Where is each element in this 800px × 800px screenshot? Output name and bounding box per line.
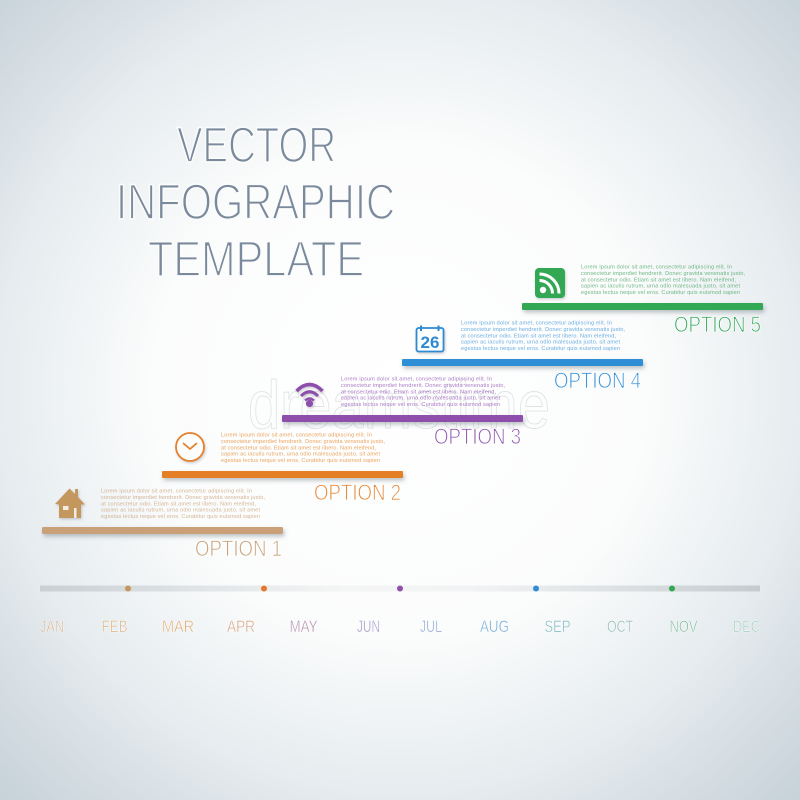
title [116, 117, 395, 287]
text block: option 4: Lorem ipsum dolor sit amet, consectetur adipiscing elit. In [461, 321, 612, 327]
watermark: dreamstime [248, 367, 550, 443]
month labels: OCT [607, 618, 633, 636]
timeline track [40, 586, 760, 592]
month labels: JUN [357, 618, 380, 636]
month labels: JUL [420, 618, 442, 636]
text block: option 5: Lorem ipsum dolor sit amet, consectetur adipiscing elit. In [581, 265, 732, 271]
text block: option 5 [581, 265, 745, 296]
icon: calendar [416, 326, 444, 352]
timeline [40, 586, 760, 636]
text block: option 1: at consectetur odio. Etiam sit amet est libero. Nam eleifend, [101, 501, 256, 507]
month labels: SEP [544, 618, 570, 636]
title: VECTOR [177, 117, 336, 173]
text block: option 4: at consectetur odio. Etiam sit amet est libero. Nam eleifend, [461, 333, 616, 339]
bar: option 3 [282, 415, 523, 422]
month labels: JAN [40, 618, 64, 636]
panel: option 1 [42, 488, 283, 561]
panel: option 5 [522, 265, 763, 337]
text block: option 2: consectetur imperdiet hendrerit. Donec gravida venenatis justo, [221, 439, 385, 445]
text block: option 2 [221, 433, 385, 464]
text block: option 5: egestas lectus neque vel eros. Curabitur quis euismod sapien [581, 290, 740, 296]
timeline markers [125, 586, 675, 592]
panel: option 4 [402, 321, 643, 393]
month labels: APR [227, 618, 255, 636]
text block: option 1 [101, 489, 265, 520]
label: option 4: OPTION 4 [554, 368, 641, 393]
month labels: MAY [290, 618, 318, 636]
icon: house [55, 488, 85, 518]
icon: calendar: 26 [421, 333, 439, 352]
icon: rss [535, 268, 565, 298]
bar: option 2 [162, 471, 403, 478]
text block: option 5: consectetur imperdiet hendrerit. Donec gravida venenatis justo, [581, 271, 745, 277]
bar: option 1 [42, 527, 283, 534]
icon: clock [176, 433, 204, 461]
panel: option 2 [162, 433, 403, 505]
text block: option 3 [341, 377, 505, 408]
text block: option 3: consectetur imperdiet hendrerit. Donec gravida venenatis justo, [341, 383, 505, 389]
text block: option 3: at consectetur odio. Etiam sit amet est libero. Nam eleifend, [341, 389, 496, 395]
title: INFOGRAPHIC [116, 174, 395, 230]
text block: option 1: consectetur imperdiet hendrerit. Donec gravida venenatis justo, [101, 495, 265, 501]
text block: option 4: consectetur imperdiet hendrerit. Donec gravida venenatis justo, [461, 327, 625, 333]
label: option 2: OPTION 2 [314, 480, 401, 505]
text block: option 3: Lorem ipsum dolor sit amet, consectetur adipiscing elit. In [341, 377, 492, 383]
text block: option 5: at consectetur odio. Etiam sit amet est libero. Nam eleifend, [581, 277, 736, 283]
text block: option 1: sapien ac iaculis rutrum, urna odio malesuada justo, sit amet [101, 508, 260, 514]
month labels [40, 618, 760, 636]
bar: option 4 [402, 359, 643, 366]
bar: option 5 [522, 303, 763, 310]
month labels: AUG [480, 618, 509, 636]
panel: option 3 [282, 377, 523, 449]
text block: option 5: sapien ac iaculis rutrum, urna odio malesuada justo, sit amet [581, 284, 740, 290]
label: option 1: OPTION 1 [195, 536, 282, 561]
icon: wifi [296, 384, 322, 407]
month labels: DEC [733, 618, 760, 636]
text block: option 2: egestas lectus neque vel eros. Curabitur quis euismod sapien [221, 458, 380, 464]
text block: option 2: sapien ac iaculis rutrum, urna odio malesuada justo, sit amet [221, 452, 380, 458]
text block: option 4: sapien ac iaculis rutrum, urna odio malesuada justo, sit amet [461, 340, 620, 346]
month labels: NOV [670, 618, 698, 636]
text block: option 4: egestas lectus neque vel eros. Curabitur quis euismod sapien [461, 346, 620, 352]
title: TEMPLATE [148, 231, 364, 287]
text block: option 3: sapien ac iaculis rutrum, urna odio malesuada justo, sit amet [341, 396, 500, 402]
text block: option 2: at consectetur odio. Etiam sit amet est libero. Nam eleifend, [221, 445, 376, 451]
text block: option 1: Lorem ipsum dolor sit amet, consectetur adipiscing elit. In [101, 489, 252, 495]
text block: option 4 [461, 321, 625, 352]
month labels: MAR [162, 618, 194, 636]
text block: option 3: egestas lectus neque vel eros. Curabitur quis euismod sapien [341, 402, 500, 408]
text block: option 2: Lorem ipsum dolor sit amet, consectetur adipiscing elit. In [221, 433, 372, 439]
text block: option 1: egestas lectus neque vel eros. Curabitur quis euismod sapien [101, 514, 260, 520]
label: option 5: OPTION 5 [674, 312, 761, 337]
label: option 3: OPTION 3 [434, 424, 521, 449]
month labels: FEB [102, 618, 128, 636]
